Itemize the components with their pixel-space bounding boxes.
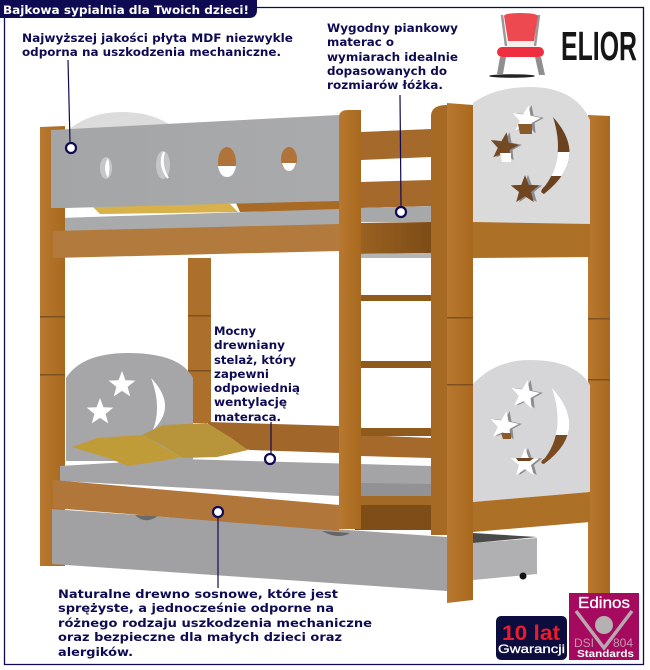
upper right headboard xyxy=(473,87,590,225)
callout text: wymiarach idealnie xyxy=(327,50,458,64)
lower back rail xyxy=(208,422,431,458)
callout: wooden frame xyxy=(214,324,300,464)
callout text: Wygodny piankowy xyxy=(327,21,459,35)
ladder rungs xyxy=(342,295,433,530)
drawer under the lower bed xyxy=(52,509,537,591)
leader and marker xyxy=(265,422,275,464)
pillow seen through the top bed xyxy=(92,202,238,214)
callout text: alergików. xyxy=(58,645,133,659)
callout text: sprężyste, a jednocześnie odporne na xyxy=(58,601,334,615)
callout text: Naturalne drewno sosnowe, które jest xyxy=(58,587,339,601)
upper front rail xyxy=(53,224,339,258)
upper back rails xyxy=(355,129,431,258)
lower right rail xyxy=(473,492,590,532)
callout text: materac o xyxy=(327,35,394,49)
title: Bajkowa sypialnia dla Twoich dzieci! xyxy=(3,3,249,17)
badge caption: Standards xyxy=(577,648,634,660)
callout text: zapewni xyxy=(214,367,269,381)
upper mattress xyxy=(60,209,339,232)
callout text: Najwyższej jakości płyta MDF niezwykle xyxy=(22,31,293,45)
leader and marker xyxy=(396,95,406,217)
callout text: Mocny xyxy=(214,324,256,338)
callout: pine wood xyxy=(58,507,372,659)
callout text: wentylację xyxy=(214,395,287,409)
lower right headboard xyxy=(473,360,590,502)
title tab xyxy=(0,0,257,18)
left front post xyxy=(40,126,65,566)
rear left posts xyxy=(188,258,211,423)
badge code number: 804 xyxy=(613,636,633,650)
callout text: różnego rodzaju uszkodzenia mechaniczne xyxy=(58,616,372,630)
strip of wood behind the top guard xyxy=(235,198,339,212)
badge caption: Gwarancji xyxy=(498,642,565,656)
rear right post xyxy=(588,115,610,600)
badge emblem xyxy=(576,611,632,648)
upper right rail xyxy=(473,222,590,258)
logo: chair icon xyxy=(489,13,545,78)
callout text: drewniany xyxy=(214,338,286,352)
badge: 10 year warranty xyxy=(496,616,567,660)
badge: Edinos standards xyxy=(569,593,639,660)
upper guard panel with cutouts xyxy=(51,115,339,208)
pillows xyxy=(72,423,248,466)
lower front rail xyxy=(53,480,339,531)
badge name: Edinos xyxy=(578,595,630,612)
arc of hidden upper headboard xyxy=(68,112,172,130)
callout text: materaca. xyxy=(214,410,281,424)
bunk bed illustration xyxy=(40,87,610,603)
callout text: stelaż, który xyxy=(214,353,297,367)
callout: MDF board xyxy=(22,31,293,153)
leader and marker xyxy=(66,60,76,153)
badge code: DSI xyxy=(574,636,594,650)
callout text: dopasowanych do xyxy=(327,64,447,78)
callout text: oraz bezpieczne dla małych dzieci oraz xyxy=(58,630,342,644)
lower left headboard xyxy=(66,353,193,461)
callout text: odpowiednią xyxy=(214,381,300,395)
badge number: 10 lat xyxy=(502,622,560,645)
ladder rail left xyxy=(339,110,361,529)
ladder xyxy=(339,105,447,535)
front right post xyxy=(447,103,473,603)
ladder rail right xyxy=(431,105,447,535)
lower mattress xyxy=(60,459,431,497)
callout text: rozmiarów łóżka. xyxy=(327,78,443,92)
leader and marker xyxy=(213,507,223,588)
callout text: odporna na uszkodzenia mechaniczne. xyxy=(22,45,281,59)
callout: foam mattress xyxy=(327,21,459,217)
